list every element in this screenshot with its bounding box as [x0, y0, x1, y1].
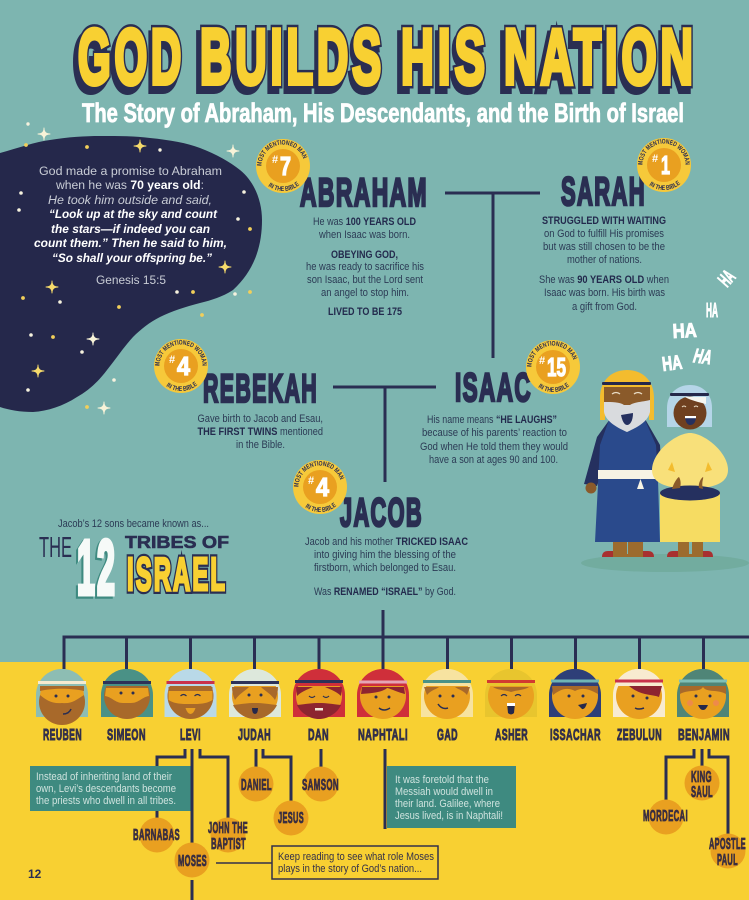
descendant: Jesus: JESUS	[278, 810, 304, 827]
Naphtali note: their land. Galilee, where	[395, 798, 500, 810]
descendant: King Saul	[684, 766, 720, 801]
12 tribes heading: 12	[77, 525, 117, 611]
Abraham badge: IN THE BIBLE	[268, 181, 300, 191]
starry blob	[0, 136, 262, 412]
Isaac text: have a son at ages 90 and 100.	[429, 454, 558, 466]
promise text: “So shall your offspring be.”	[52, 251, 213, 265]
Sarah text: mother of nations.	[567, 254, 642, 266]
tribe: Issachar: ISSACHAR	[550, 727, 601, 744]
promise text: the stars—if indeed you can	[51, 222, 210, 236]
Sarah text: but was still chosen to be the	[543, 241, 665, 253]
Naphtali note: It was foretold that the	[395, 774, 489, 786]
Abraham badge: 7	[280, 151, 291, 181]
title: BUILDS	[200, 12, 385, 100]
laughter marks	[661, 266, 740, 376]
callout: Moses: Keep reading to see what role Moses	[278, 851, 435, 863]
descendant: Samson: SAMSON	[302, 777, 339, 794]
promise text: He took him outside and said,	[48, 193, 212, 207]
12 tribes heading: 12	[75, 527, 115, 613]
promise text: God made a promise to Abraham	[39, 164, 222, 178]
Jacob text	[305, 536, 468, 598]
Sarah text: on God to fulfill His promises	[544, 228, 665, 240]
tree connectors: parents	[333, 192, 540, 637]
Rebekah badge: 4	[177, 351, 190, 381]
Abraham badge: #	[272, 154, 278, 166]
tribes of: TRIBES OF	[125, 532, 229, 552]
Rebekah text: THE FIRST TWINS mentioned	[198, 426, 323, 438]
Sarah text: She was 90 YEARS OLD when	[539, 274, 669, 286]
beard	[604, 400, 650, 432]
laughter marks: HA	[706, 300, 718, 322]
legs	[613, 542, 627, 556]
Levi note: the priests who dwell in all tribes.	[36, 795, 176, 807]
Rebekah badge: #	[169, 354, 175, 366]
title: GOD	[78, 12, 185, 100]
tribe: Judah: JUDAH	[238, 727, 271, 744]
Sarah badge: IN THE BIBLE	[649, 180, 680, 190]
head covering	[600, 370, 654, 420]
descendant: Samson	[302, 766, 339, 802]
illustration: Sarah laughing	[652, 385, 728, 557]
Rebekah badge	[154, 339, 208, 393]
descendant: Daniel	[238, 766, 274, 802]
Abraham text: an angel to stop him.	[321, 287, 409, 299]
descendant: Moses	[174, 842, 210, 878]
skirt	[660, 492, 720, 542]
descendant: Moses: MOSES	[178, 853, 207, 870]
title: HIS	[401, 12, 489, 100]
face	[674, 396, 706, 430]
Abraham name: ABRAHAM	[300, 171, 428, 215]
title: BUILDS	[196, 18, 383, 106]
Abraham text: OBEYING GOD,	[331, 249, 398, 261]
promise text: count them.” Then he said to him,	[34, 236, 227, 250]
smile	[685, 416, 696, 425]
Isaac text: because of his parents’ reaction to	[422, 427, 567, 439]
12 tribes heading	[39, 518, 229, 613]
title: BUILDS	[200, 12, 385, 100]
white headcloth	[674, 397, 706, 404]
word: the: THE	[39, 532, 72, 564]
intro line: Jacob’s 12 sons became known as...	[58, 518, 209, 530]
promise text: when he was 70 years old:	[55, 178, 204, 192]
descendant: Mordecai: MORDECAI	[643, 808, 688, 825]
Naphtali note: Messiah would dwell in	[395, 786, 493, 798]
stars	[17, 122, 252, 414]
eyes	[612, 392, 642, 394]
veil	[667, 385, 712, 427]
descendant connectors	[157, 749, 728, 900]
ground shadow	[581, 554, 749, 572]
Isaac badge: IN THE BIBLE	[538, 382, 570, 392]
promise text: Genesis 15:5	[96, 273, 166, 287]
descendant: King Saul: KING	[691, 769, 712, 786]
tribe: Simeon: SIMEON	[107, 727, 146, 744]
numeral 12	[75, 525, 117, 613]
laughter marks: HA	[672, 320, 697, 343]
descendant: Mordecai	[643, 800, 688, 834]
headband	[602, 382, 651, 385]
Sarah badge	[637, 138, 691, 192]
Abraham text: son Isaac, but the Lord sent	[307, 274, 423, 286]
title: HIS	[401, 12, 489, 100]
Isaac name: ISAAC	[455, 366, 532, 410]
Isaac text: God when He told them they would	[420, 441, 568, 453]
hands	[672, 477, 703, 489]
tribe: Levi	[164, 669, 216, 744]
panel: night sky promise	[0, 122, 262, 414]
mouth	[621, 413, 633, 425]
Jacob text: into giving him the blessing of the	[314, 549, 456, 561]
Naphtali note	[387, 766, 516, 828]
robe	[595, 420, 660, 542]
Sarah name: SARAH	[561, 170, 646, 214]
Isaac badge: #	[539, 355, 545, 367]
Jacob text: Jacob and his mother TRICKED ISAAC	[305, 536, 468, 548]
left arm	[584, 419, 610, 486]
Sarah text: Isaac was born. His birth was	[544, 287, 666, 299]
tribe: Simeon	[101, 669, 153, 744]
tribe: Dan: DAN	[308, 727, 329, 744]
laughter marks: HA	[691, 346, 715, 369]
Abraham text	[306, 216, 425, 318]
Jacob badge: MOST MENTIONED MAN	[294, 461, 344, 487]
Jacob badge: IN THE BIBLE	[305, 502, 336, 512]
Levi note	[30, 766, 194, 811]
illustration: Abraham laughing	[584, 370, 662, 557]
Abraham badge	[256, 139, 310, 193]
face	[604, 387, 650, 412]
tribe: Naphtali: NAPHTALI	[358, 727, 408, 744]
title: HIS	[397, 18, 487, 106]
tribe: Issachar	[549, 669, 601, 744]
teal background	[0, 0, 749, 662]
Abraham text: he was ready to sacrifice his	[306, 261, 425, 273]
title: GOD	[78, 12, 185, 100]
Rebekah text: in the Bible.	[236, 439, 285, 451]
yellow lower band	[0, 662, 749, 900]
descendant: Barnabas	[133, 818, 180, 852]
Abraham text: LIVED TO BE 175	[328, 306, 402, 318]
callout: Moses	[216, 846, 438, 879]
tribe: Dan	[293, 669, 345, 744]
Jacob badge	[293, 460, 347, 514]
descendant: King Saul: SAUL	[691, 784, 713, 801]
right arm	[645, 419, 662, 480]
Jacob badge: #	[308, 475, 314, 487]
tribe: Levi: LEVI	[180, 727, 201, 744]
belt	[660, 486, 720, 500]
Sarah badge: 1	[661, 150, 670, 180]
Levi note: Instead of inheriting land of their	[36, 771, 172, 783]
descendant: Barnabas: BARNABAS	[133, 827, 180, 844]
title: GOD	[74, 18, 183, 106]
descendant: John the Baptist	[208, 818, 248, 853]
Isaac text	[420, 414, 568, 466]
tribe: Reuben: REUBEN	[43, 727, 82, 744]
family tree bar	[62, 636, 749, 669]
Rebekah badge: MOST MENTIONED WOMAN	[154, 340, 207, 366]
promise text	[34, 164, 227, 287]
Rebekah name: REBEKAH	[203, 367, 318, 411]
israel	[127, 548, 227, 600]
israel: ISRAEL	[127, 548, 227, 600]
tribe: Zebulun: ZEBULUN	[617, 727, 662, 744]
promise text: “Look up at the sky and count	[49, 207, 218, 221]
Jacob name: JACOB	[340, 491, 423, 535]
Jacob badge: 4	[316, 472, 329, 502]
Sarah text: a gift from God.	[572, 301, 637, 313]
descendant: Jesus	[274, 800, 308, 836]
Isaac badge: 15	[547, 352, 566, 382]
Isaac badge	[526, 340, 580, 394]
tribe: Zebulun	[613, 669, 665, 744]
Isaac badge: MOST MENTIONED MAN	[526, 341, 578, 367]
Rebekah text: Gave birth to Jacob and Esau,	[198, 413, 323, 425]
Abraham text: He was 100 YEARS OLD	[313, 216, 416, 228]
Sarah badge: MOST MENTIONED WOMAN	[638, 138, 690, 165]
Isaac text: His name means “HE LAUGHS”	[427, 414, 557, 426]
descendant: Daniel: DANIEL	[241, 777, 272, 794]
page number: 12	[28, 867, 42, 881]
Sarah text: STRUGGLED WITH WAITING	[542, 215, 666, 227]
arms and shawl	[652, 433, 728, 488]
Abraham badge: MOST MENTIONED MAN	[256, 140, 308, 166]
tribe: Benjamin	[677, 669, 730, 744]
Jacob text: firstborn, which belonged to Esau.	[314, 562, 456, 574]
Levi note: own, Levi’s descendants become	[36, 783, 176, 795]
Rebekah text	[198, 413, 323, 451]
tribe: Naphtali	[357, 669, 409, 744]
Rebekah badge: IN THE BIBLE	[166, 381, 198, 391]
laughter marks: HA	[714, 266, 740, 291]
israel: ISRAEL	[127, 548, 227, 600]
callout: Moses: plays in the story of God’s nation...	[278, 863, 422, 875]
Naphtali note: Jesus lived, is in Naphtali!	[395, 810, 503, 822]
tribe: Reuben	[36, 669, 88, 744]
tribe: Gad	[421, 669, 473, 744]
Sarah badge: #	[652, 153, 658, 165]
tribe: Gad: GAD	[437, 727, 458, 744]
legs	[678, 542, 689, 556]
sandals	[667, 551, 713, 557]
sandals	[602, 551, 654, 557]
title	[74, 12, 697, 106]
tribe: Asher	[485, 669, 537, 744]
Sarah text	[539, 215, 669, 313]
laughter marks: HA	[661, 352, 683, 376]
tribe: Asher: ASHER	[495, 727, 528, 744]
Jacob text: Was RENAMED “ISRAEL” by God.	[314, 586, 456, 598]
belt	[598, 470, 658, 479]
descendant: Apostle Paul	[709, 834, 746, 869]
infographic page: JOHN THE	[208, 820, 248, 837]
tribe: Judah	[229, 669, 281, 744]
Abraham text: when Isaac was born.	[318, 229, 410, 241]
descendant: John the Baptist: BAPTIST	[211, 836, 246, 853]
